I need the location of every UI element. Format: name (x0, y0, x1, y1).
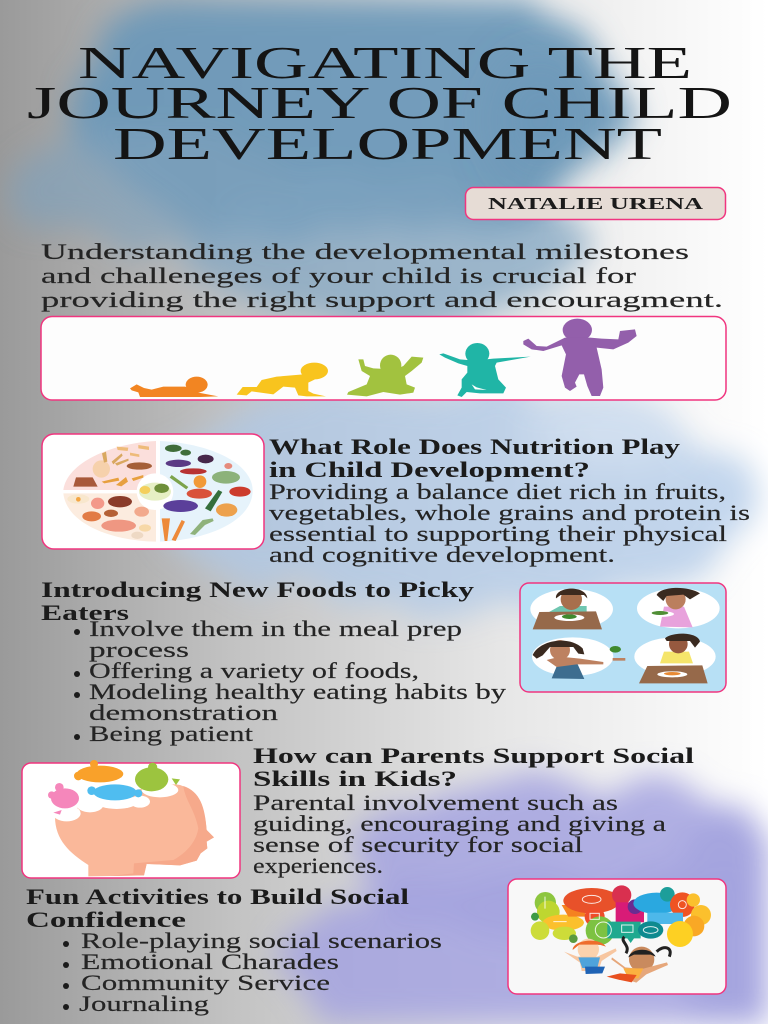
icon: food plate (63, 441, 253, 542)
bullet list: fun activities: Emotional Charades (81, 949, 339, 974)
body: nutrition: vegetables, whole grains and protein is (269, 500, 750, 525)
icon: boy with fork (639, 634, 708, 683)
icon: face shadow (110, 786, 214, 876)
icon: crawling baby (237, 363, 328, 396)
heading: fun activities: Fun Activities to Build Social (26, 884, 409, 909)
icon: green puzzle piece (135, 763, 180, 791)
icon: orange puzzle piece (74, 760, 123, 782)
body: social skills: Parental involvement such as (253, 790, 618, 815)
icon: blue puzzle piece (87, 784, 142, 800)
body: nutrition: Providing a balance diet rich in fruits, (269, 479, 726, 504)
panel: children activities image (508, 879, 726, 994)
body: nutrition: and cognitive development. (269, 542, 615, 567)
icon: head silhouette (55, 784, 214, 876)
body: nutrition: essential to supporting their physical (269, 521, 727, 546)
author name badge (466, 188, 726, 220)
icon: boy at table (533, 589, 602, 629)
heading: picky eaters: Eaters (41, 600, 130, 625)
heading: picky eaters: Introducing New Foods to Picky (41, 577, 474, 602)
icon: white puzzle halo (53, 783, 178, 821)
bullet list: fun activities: Role-playing social scenarios (81, 928, 442, 953)
body: social skills: sense of security for social (253, 832, 583, 857)
body: nutrition (269, 479, 750, 567)
intro text: and challeneges of your child is crucial for (41, 263, 637, 288)
title: JOURNEY OF CHILD (27, 77, 732, 128)
bullet list: picky eaters: Modeling healthy eating habits by (89, 679, 506, 704)
icon: sitting baby (347, 355, 423, 396)
bullet list: picky eaters: Involve them in the meal prep (89, 616, 462, 641)
heading: nutrition (269, 434, 680, 482)
icon: purple toddler (523, 319, 637, 396)
intro text (41, 239, 723, 312)
heading: fun activities: Confidence (26, 907, 186, 932)
body: social skills: experiences. (253, 853, 383, 878)
icon: girl refusing broccoli (533, 640, 625, 679)
bullet list: fun activities: Journaling (79, 991, 209, 1016)
icon: lying baby (130, 377, 218, 397)
heading: social skills: Skills in Kids? (253, 766, 457, 791)
icon: teal baby (439, 343, 531, 397)
heading: social skills: How can Parents Support Social (253, 743, 694, 768)
bullet list: fun activities: Community Service (81, 970, 330, 995)
bullet list: picky eaters: process (89, 637, 189, 662)
heading: nutrition: in Child Development? (269, 457, 590, 482)
icon: girl with pigtails (607, 937, 670, 983)
heading: fun activities (26, 884, 409, 932)
icon: pink puzzle piece (48, 783, 79, 815)
bullet list: picky eaters (74, 616, 506, 746)
intro text: providing the right support and encouragment. (41, 287, 723, 312)
panel: baby growth stages (41, 316, 726, 400)
bullet list: picky eaters: Being patient (89, 721, 253, 746)
panel: picky eater children image (520, 583, 726, 692)
title: NAVIGATING THE (78, 37, 692, 88)
text block: picky eaters (41, 577, 506, 746)
heading: social skills (253, 743, 694, 791)
bullet list: fun activities (63, 928, 442, 1016)
text block: nutrition (269, 434, 750, 567)
title: DEVELOPMENT (113, 118, 662, 169)
panel: puzzle head image (22, 760, 240, 878)
bullet list: picky eaters: Offering a variety of foods, (89, 658, 419, 683)
panel: nutrition plate image (42, 434, 264, 549)
body: social skills (253, 790, 666, 878)
heading: picky eaters (41, 577, 474, 625)
bullet list: picky eaters: demonstration (89, 700, 278, 725)
body: social skills: guiding, encouraging and giving a (253, 811, 666, 836)
icon: girl with plate (646, 588, 700, 627)
text block: fun activities (26, 884, 442, 1016)
title (27, 37, 732, 169)
icon: colorful idea bubbles (531, 885, 711, 947)
text block: social skills (253, 743, 694, 878)
intro text: Understanding the developmental milestones (41, 239, 689, 264)
icon: boy with red hair (564, 939, 617, 974)
author name badge: NATALIE URENA (488, 194, 704, 213)
heading: nutrition: What Role Does Nutrition Play (269, 434, 680, 459)
